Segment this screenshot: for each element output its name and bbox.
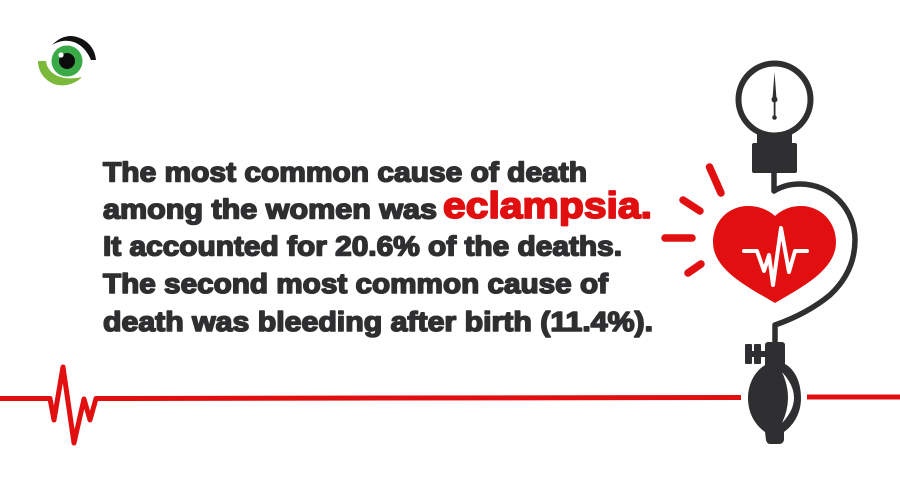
heartbeat line inside heart <box>744 228 807 285</box>
highlighted word: eclampsia: eclampsia. <box>443 185 652 226</box>
icon: heart <box>713 206 836 303</box>
text block: main message <box>103 156 653 337</box>
line 1: The most common cause of death <box>103 156 587 188</box>
icon: inflation bulb <box>745 342 801 444</box>
heartbeat line: left section <box>0 367 741 443</box>
icon: eye logo <box>38 36 96 85</box>
line 4: The second most common cause of <box>103 268 609 299</box>
line 2: among the women was <box>103 194 437 224</box>
heartbeat line: right section <box>807 394 900 400</box>
icon: radiating pulse rays <box>665 167 721 273</box>
icon: pressure gauge <box>738 64 810 173</box>
line 3: It accounted for 20.6% of the deaths. <box>103 230 622 262</box>
tube connecting gauge and bulb <box>774 172 855 346</box>
line 5: death was bleeding after birth (11.4%). <box>103 306 653 337</box>
